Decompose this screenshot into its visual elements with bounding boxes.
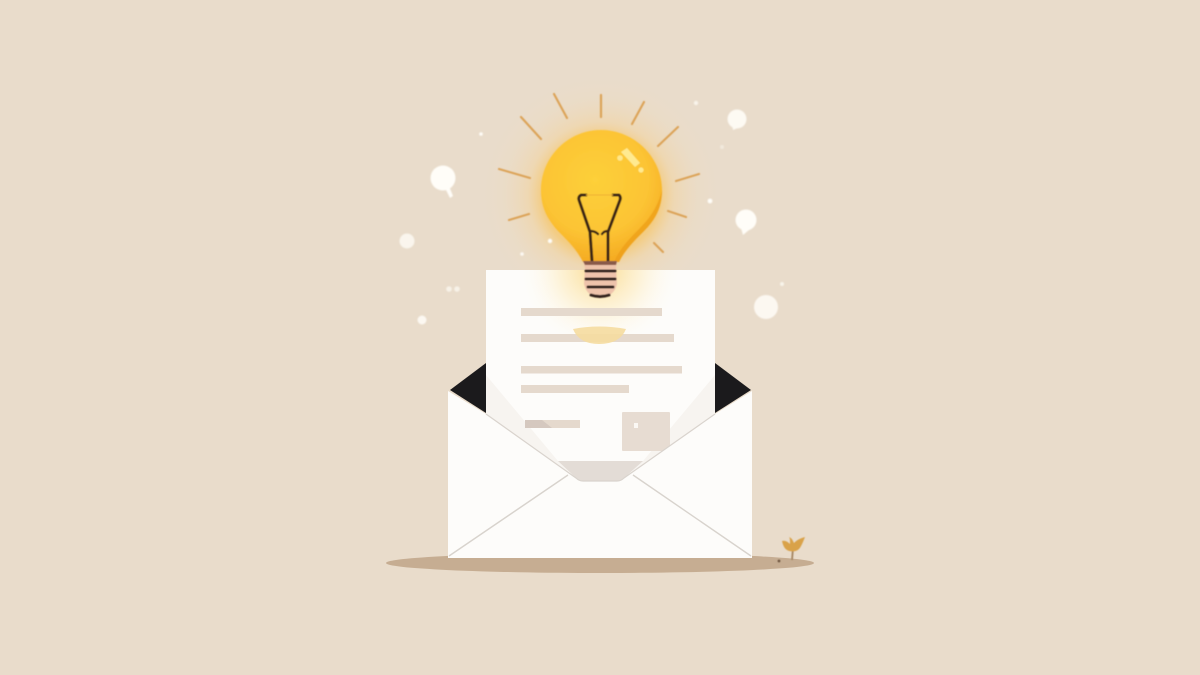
short text bar: [525, 420, 580, 428]
envelope fold lines: [449, 475, 751, 556]
icon: light bulb: [541, 130, 662, 297]
bulb highlight: [617, 148, 644, 173]
text line 4: [521, 385, 629, 393]
text line 1: [521, 308, 662, 316]
filament: [579, 195, 620, 261]
bubble: right: [736, 210, 756, 235]
grey inner pocket: [558, 461, 643, 481]
bulb lower right shading: [614, 190, 662, 262]
paper glow: [486, 270, 715, 350]
icon: small plant: [778, 537, 805, 562]
bubble: lower left: [418, 316, 426, 324]
bulb glow: [483, 77, 719, 313]
filament top bridge: [586, 194, 613, 196]
envelope front: [448, 391, 752, 558]
bubble: upper left: [430, 166, 456, 198]
icon: light rays: [499, 94, 699, 252]
stamp box: [622, 412, 670, 451]
bubble: upper right: [728, 110, 746, 130]
ground shadow: [386, 553, 814, 573]
text line 3: [521, 366, 682, 374]
floating bubbles and sparkles: [400, 101, 784, 324]
screw base: [583, 261, 617, 297]
bulb glass: [541, 130, 662, 262]
bubble: left: [400, 234, 414, 248]
bulb reflection: [573, 326, 626, 344]
sparkles: scattered dots: [479, 101, 784, 286]
letter paper: [486, 270, 715, 485]
envelope back: dark inner corners: [450, 363, 751, 413]
bubble: lower right: [754, 295, 778, 319]
sparkles: left pair: [446, 286, 460, 292]
flap edge lines: [486, 414, 715, 481]
paper folded shade: [486, 375, 715, 480]
text line 2: [521, 334, 674, 342]
